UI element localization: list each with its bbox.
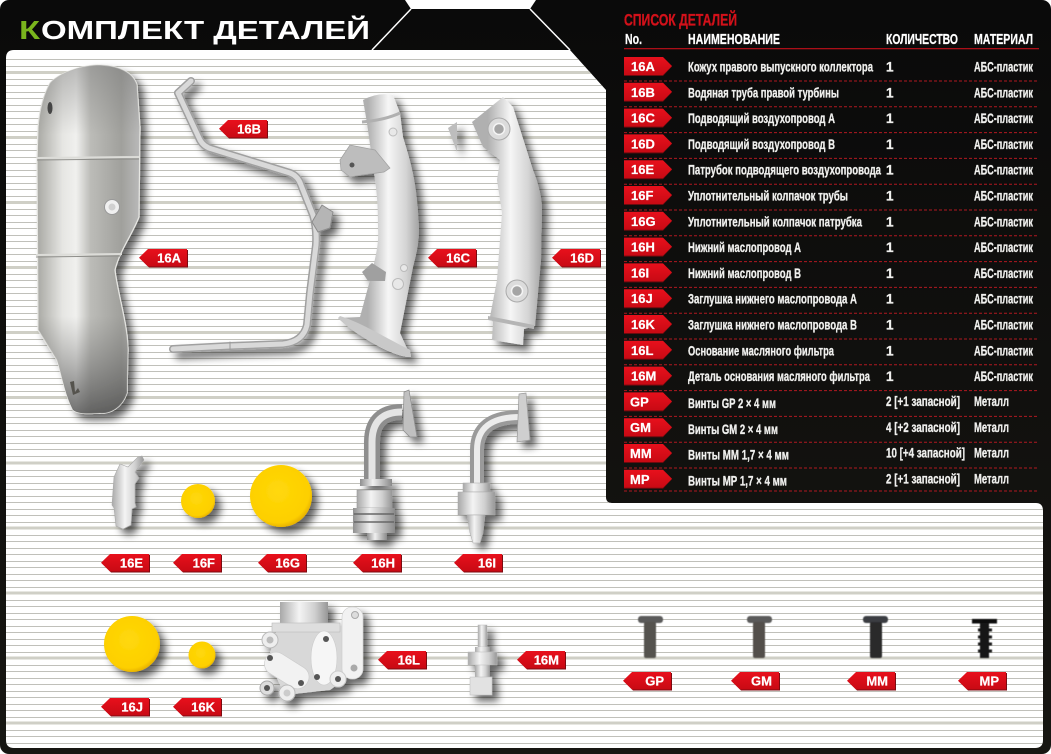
label MP [958, 672, 1007, 690]
part 16C: air duct A [338, 94, 419, 357]
label GP [623, 672, 672, 690]
row GP [624, 392, 1009, 411]
label MP: MP [980, 674, 999, 688]
table header [625, 32, 1033, 48]
row 16F: 16F [631, 188, 653, 203]
label 16A: 16A [157, 250, 182, 266]
row 16J: 16J [631, 291, 653, 306]
row 16E [624, 160, 1033, 179]
label 16E [101, 554, 150, 572]
label 16J: 16J [121, 700, 143, 714]
row MP [624, 470, 1009, 489]
label 16C [428, 249, 477, 268]
row 16M [624, 367, 1033, 386]
screw GM [747, 616, 772, 658]
row 16L: 1 [886, 343, 894, 358]
part 16B: water pipe [173, 81, 333, 350]
label 16F: 16F [193, 556, 215, 570]
row MP: 2 [+1 запасной] [886, 471, 960, 486]
part 16L: oil filter base [260, 602, 363, 701]
row 16C: 16C [631, 111, 655, 126]
table title: СПИСОК ДЕТАЛЕЙ [624, 10, 737, 30]
part 16F: yellow cap [181, 484, 215, 518]
label 16L: 16L [398, 652, 420, 668]
row 16M: 1 [886, 369, 894, 384]
row 16I [624, 263, 1033, 282]
row 16L [624, 341, 1033, 360]
label GM: GM [751, 674, 772, 688]
table header: КОЛИЧЕСТВО [886, 32, 958, 48]
row 16D [624, 134, 1033, 153]
table header: No. [625, 32, 642, 48]
label 16D [552, 249, 601, 268]
row GP: Металл [974, 394, 1009, 409]
row 16E: 1 [886, 163, 894, 178]
screw MP [972, 619, 997, 658]
row 16G: 16G [631, 214, 656, 229]
panel: parts list table [624, 10, 1039, 491]
label 16H [353, 554, 402, 572]
part 16H: oil pipe A [353, 390, 417, 540]
label 16K: 16K [191, 700, 216, 714]
row 16M: 16M [631, 369, 656, 384]
label 16H: 16H [371, 556, 395, 570]
row 16A: 1 [886, 60, 894, 74]
label 16I: 16I [478, 556, 496, 570]
label 16K [173, 698, 222, 716]
row 16I: 16I [631, 265, 649, 280]
row 16A [624, 57, 1033, 76]
screw MM [863, 616, 888, 658]
row 16D: 1 [886, 137, 894, 152]
row 16L: 16L [631, 343, 653, 358]
row 16J [624, 289, 1033, 308]
label 16I [454, 554, 503, 572]
row MM: Металл [974, 446, 1009, 461]
label 16B: 16B [237, 122, 261, 136]
row 16G: Уплотнительный колпачок патрубка [688, 214, 862, 229]
row 16I: Нижний маслопровод В [688, 266, 801, 281]
part 16I: oil pipe B [458, 393, 530, 543]
part 16K: yellow plug [188, 642, 216, 668]
row GM: Винты GM 2 × 4 мм [688, 422, 778, 437]
row 16F [624, 186, 1033, 205]
row 16B: Водяная труба правой турбины [688, 85, 839, 100]
part 16D: air duct B [448, 97, 542, 345]
row 16A: 16A [631, 59, 655, 74]
label GP: GP [645, 674, 664, 688]
row MM: MM [630, 446, 652, 461]
row 16B: 16B [631, 85, 655, 100]
row 16H [624, 238, 1033, 257]
table header: НАИМЕНОВАНИЕ [688, 32, 780, 48]
row 16K: 16K [631, 317, 655, 332]
label GM [731, 672, 780, 690]
label 16L [378, 651, 427, 670]
row 16K [624, 315, 1033, 334]
row 16F: Уплотнительный колпачок трубы [688, 188, 848, 204]
part 16G: yellow cap [250, 465, 312, 527]
label 16C: 16C [446, 250, 471, 266]
row 16L: Основание масляного фильтра [688, 343, 834, 358]
title: ОМПЛЕКТ ДЕТАЛЕЙ [41, 15, 370, 45]
row GP: Винты GP 2 × 4 мм [688, 396, 776, 411]
label MM: MM [866, 674, 888, 688]
row 16J: 1 [886, 292, 894, 307]
title: К [19, 15, 40, 45]
row GM: Металл [974, 420, 1009, 435]
row 16G [624, 212, 1033, 231]
row 16K: 1 [886, 318, 894, 332]
row MM: Винты MM 1,7 × 4 мм [688, 448, 789, 463]
row 16B: 1 [886, 85, 894, 100]
label MM [847, 672, 896, 690]
row 16F: 1 [886, 188, 894, 204]
row 16H: 1 [886, 240, 894, 255]
part 16A: exhaust shield [36, 65, 140, 414]
row 16J: Заглушка нижнего маслопровода А [688, 292, 857, 307]
label 16D: 16D [570, 250, 594, 266]
row 16C: Подводящий воздухопровод А [688, 111, 835, 126]
label 16B [219, 120, 268, 138]
row 16C: 1 [886, 111, 894, 126]
row GP: GP [630, 394, 649, 409]
row 16D: Подводящий воздухопровод В [688, 137, 835, 152]
label 16M [517, 651, 566, 670]
row MM: 10 [+4 запасной] [886, 446, 965, 461]
part 16M: filter base detail [468, 625, 497, 695]
row MP: Винты MP 1,7 × 4 мм [688, 473, 787, 488]
part 16E: air duct nozzle [112, 456, 144, 529]
label 16F [173, 554, 222, 572]
row MP: Металл [974, 471, 1009, 486]
row 16G: 1 [886, 214, 894, 229]
label 16J [101, 698, 150, 716]
row 16C [624, 109, 1033, 128]
label 16E: 16E [120, 556, 143, 570]
row 16M: Деталь основания масляного фильтра [688, 369, 870, 384]
row 16D: 16D [631, 136, 655, 151]
row 16H: Нижний маслопровод А [688, 240, 801, 255]
label 16A [139, 249, 188, 268]
row 16K: Заглушка нижнего маслопровода В [688, 318, 857, 332]
row 16I: 1 [886, 266, 894, 281]
part 16J: yellow plug [104, 616, 160, 672]
header tab decoration [372, 0, 570, 50]
row 16B [624, 83, 1033, 102]
label 16M: 16M [534, 652, 559, 668]
row GM [624, 418, 1009, 437]
screw GP [638, 616, 663, 658]
row MP: MP [630, 472, 650, 487]
label 16G: 16G [275, 556, 300, 570]
row MM [624, 444, 1009, 463]
row 16E: Патрубок подводящего воздухопровода [688, 163, 881, 178]
row GM: GM [630, 420, 651, 435]
row GM: 4 [+2 запасной] [886, 420, 960, 435]
row 16A: Кожух правого выпускного коллектора [688, 60, 873, 74]
label 16G [258, 554, 307, 572]
row 16H: 16H [631, 240, 655, 255]
row 16E: 16E [631, 162, 654, 177]
row GP: 2 [+1 запасной] [886, 394, 960, 409]
